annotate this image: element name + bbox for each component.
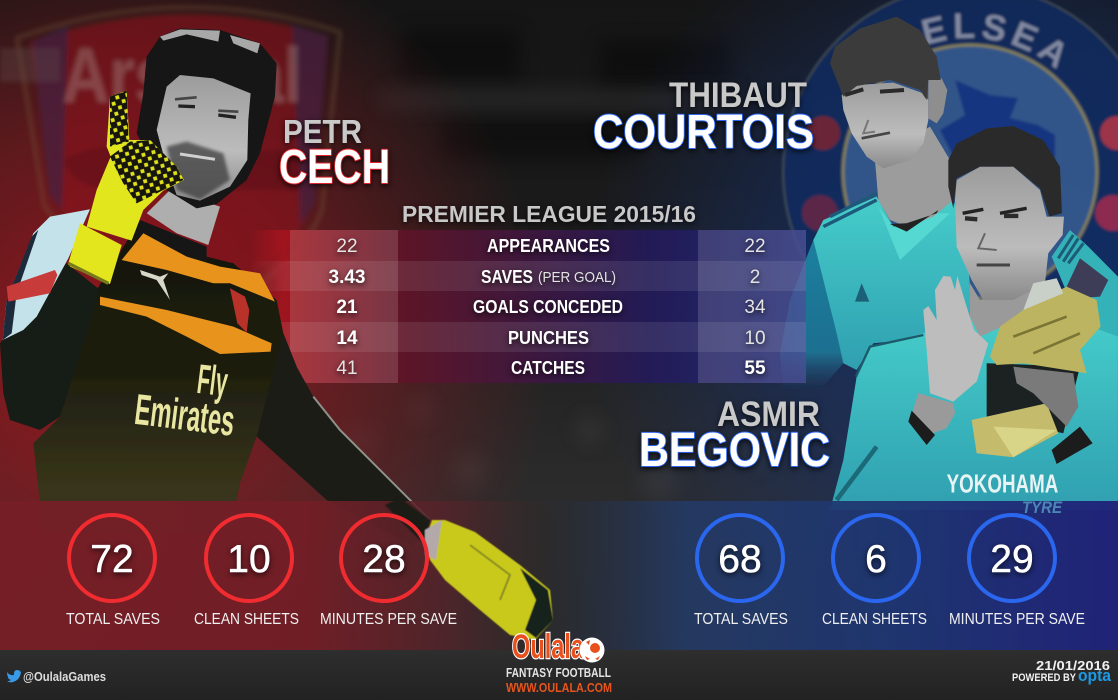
- stat: Chelsea clean sheets: 6: [865, 538, 887, 581]
- row: appearances: 22: [336, 236, 358, 257]
- Begovic raised hand: [923, 276, 988, 402]
- name: Petr Cech: PETR: [283, 113, 362, 150]
- stats: Cech: [66, 515, 457, 628]
- row: catches: [336, 358, 766, 379]
- Begovic back shoulder: [1052, 230, 1118, 343]
- table heading: PREMIER LEAGUE 2015/16: [402, 201, 696, 227]
- row: saves per goal: (PER GOAL): [538, 269, 616, 286]
- row: appearances: [336, 236, 766, 257]
- row: catches: CATCHES: [511, 358, 585, 378]
- name: Thibaut Courtois: THIBAUT: [669, 76, 807, 115]
- powered by opta: opta: [1078, 666, 1111, 685]
- logo website: WWW.OULALA.COM: [506, 680, 612, 695]
- name: Asmir Begovic: ASMIR: [717, 395, 820, 434]
- powered by opta: [1012, 666, 1111, 685]
- stat: Chelsea total saves: [694, 515, 788, 628]
- Courtois sleeve: [780, 240, 867, 390]
- Begovic hair: [948, 126, 1062, 217]
- Courtois face: [842, 83, 928, 168]
- Begovic sponsor: YOKOHAMA: [947, 469, 1058, 499]
- name: Petr Cech: [279, 113, 390, 194]
- name: Thibaut Courtois: [593, 76, 814, 159]
- Cech neck: [147, 190, 220, 245]
- row: catches: 41: [336, 358, 358, 379]
- stat: Cech minutes per save: MINUTES PER SAVE: [320, 611, 457, 628]
- Cech sponsor: Emirates: [132, 386, 237, 446]
- stat: Chelsea minutes per save: 29: [990, 538, 1034, 581]
- right bottom panel: [540, 501, 1118, 650]
- Cech glove: [87, 91, 184, 241]
- row: goals conceded: 21: [336, 297, 358, 318]
- Cech right glove: [385, 498, 553, 640]
- Cech face: [157, 75, 251, 201]
- twitter handle: @OulalaGames: [23, 669, 106, 684]
- player: Thibaut Courtois: [780, 17, 973, 390]
- row: goals conceded: GOALS CONCEDED: [473, 297, 623, 317]
- Begovic holding hand: [1013, 367, 1078, 427]
- Begovic face: [955, 167, 1064, 300]
- Cech torso: [33, 220, 297, 533]
- row: punches: 14: [336, 328, 358, 349]
- name: Thibaut Courtois: COURTOIS: [593, 106, 814, 159]
- crest: Arsenal: Arsenal: [62, 31, 302, 119]
- stat: Cech minutes per save: [320, 515, 457, 628]
- table background: [250, 230, 806, 383]
- Courtois hair: [830, 17, 941, 100]
- row: punches: 10: [744, 328, 766, 349]
- Begovic jersey: [830, 317, 1118, 510]
- row: saves per goal: SAVES: [481, 267, 533, 287]
- row: goals conceded: [336, 297, 766, 318]
- crest: Chelsea: CHELSEA: [920, 11, 1065, 70]
- Cech sponsor: [132, 348, 242, 446]
- name: Asmir Begovic: BEGOVIC: [639, 424, 830, 477]
- name: Asmir Begovic: [639, 395, 830, 477]
- row: punches: [336, 328, 766, 349]
- row: saves per goal: 2: [750, 267, 760, 288]
- stat: Chelsea total saves: TOTAL SAVES: [694, 611, 788, 628]
- left bottom panel: [0, 501, 560, 650]
- Cech helmet: [137, 28, 277, 208]
- row: goals conceded: 34: [744, 297, 766, 318]
- powered by opta: POWERED BY: [1012, 672, 1077, 684]
- player: Asmir Begovic: [830, 126, 1118, 510]
- stat: Chelsea minutes per save: MINUTES PER SAVE: [949, 611, 1085, 628]
- player: Petr Cech: [0, 28, 430, 547]
- stats: Chelsea keepers: [694, 515, 1085, 628]
- Cech sleeve patch: [7, 270, 57, 302]
- Cech sponsor: Fly: [195, 355, 230, 405]
- Cech shoulder: [3, 209, 90, 340]
- stat: Chelsea clean sheets: [822, 515, 927, 628]
- Begovic trophy: [987, 363, 1080, 433]
- Cech puma logo: [140, 270, 170, 300]
- stat: Chelsea minutes per save: [949, 515, 1085, 628]
- Cech right arm: [257, 333, 430, 547]
- row: appearances: 22: [744, 236, 766, 257]
- stat: Chelsea clean sheets: CLEAN SHEETS: [822, 611, 927, 628]
- logo: Oulala: Oulala: [512, 628, 585, 666]
- date: 21/01/2016: [1036, 658, 1110, 673]
- logo tagline: FANTASY FOOTBALL: [506, 665, 611, 680]
- stat: Cech minutes per save: 28: [362, 538, 406, 581]
- row: catches: 55: [744, 358, 766, 379]
- Courtois neck: [875, 127, 953, 227]
- row: appearances: APPEARANCES: [487, 236, 610, 256]
- crest: Chelsea: [781, 0, 1118, 300]
- stat: Cech total saves: TOTAL SAVES: [66, 611, 160, 628]
- stat: Cech clean sheets: CLEAN SHEETS: [194, 611, 299, 628]
- crest: Arsenal: [0, 7, 340, 305]
- row: saves per goal: [329, 267, 760, 288]
- stat: Chelsea total saves: 68: [718, 538, 762, 581]
- stat: Cech total saves: [66, 515, 160, 628]
- icon: football: [580, 638, 604, 662]
- stat: Cech total saves: 72: [90, 538, 134, 581]
- Begovic neck: [970, 283, 1047, 337]
- icon: twitter bird: [7, 670, 21, 682]
- Courtois jersey: [813, 195, 973, 370]
- row: punches: PUNCHES: [508, 328, 589, 348]
- Cech badge: [230, 288, 249, 333]
- table: stats comparison: [329, 236, 766, 379]
- footer bar: [0, 650, 1118, 700]
- Cech glove cuff: [68, 223, 122, 284]
- stat: Cech clean sheets: 10: [227, 538, 271, 581]
- Cech collar and stripes: [133, 220, 207, 263]
- logo: Oulala: [506, 628, 612, 695]
- stat: Cech clean sheets: [194, 515, 299, 628]
- name: Petr Cech: CECH: [279, 141, 390, 194]
- Cech raised sleeve: [0, 263, 100, 430]
- tyre sponsor: TYRE: [1022, 498, 1063, 517]
- row: saves per goal: 3.43: [329, 267, 365, 288]
